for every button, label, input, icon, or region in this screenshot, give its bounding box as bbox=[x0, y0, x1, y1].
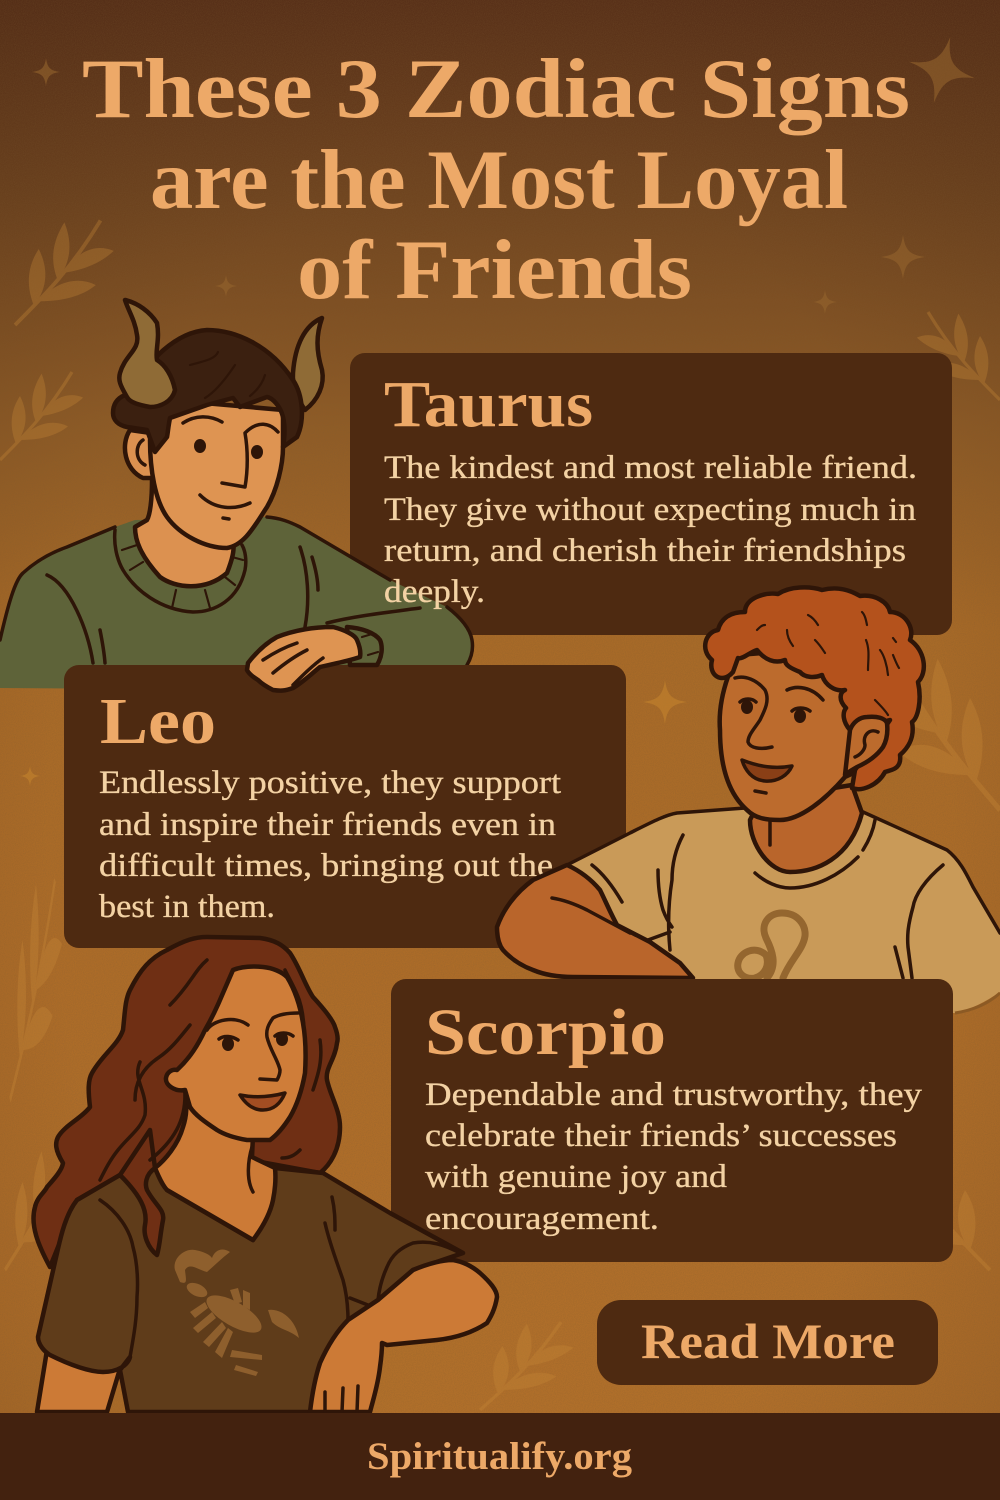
left front strand bbox=[120, 1130, 163, 1255]
panel: Scorpio bbox=[391, 979, 953, 1262]
text: Taurus heading and description bbox=[384, 368, 917, 610]
shirt outline bbox=[567, 807, 1000, 933]
shirt folds bbox=[592, 835, 943, 978]
panel: Leo bbox=[64, 665, 626, 948]
arm bbox=[497, 865, 693, 978]
text: Leo heading and description: difficult times, bringing out the bbox=[99, 848, 553, 884]
footer: Spiritualify.org bbox=[367, 1435, 633, 1478]
text: Leo heading and description: Endlessly positive, they support bbox=[99, 765, 561, 801]
face details bbox=[735, 677, 823, 793]
collar bbox=[115, 530, 246, 612]
hair strands bbox=[190, 352, 265, 398]
button: Read More: Read More bbox=[641, 1313, 895, 1369]
hair bbox=[113, 330, 302, 452]
ear bbox=[125, 430, 165, 478]
neck bbox=[750, 785, 862, 872]
left horn bbox=[119, 300, 175, 407]
text: Taurus heading and description: They give without expecting much in bbox=[384, 492, 916, 528]
right horn bbox=[293, 318, 323, 410]
text: Taurus heading and description: return, and cherish their friendships bbox=[384, 533, 906, 569]
illustration: Taurus character bbox=[0, 300, 473, 690]
title: are the Most Loyal bbox=[150, 133, 848, 227]
left arm bbox=[37, 1350, 122, 1412]
text: Scorpio heading and description: celebrate their friends’ successes bbox=[425, 1118, 897, 1154]
text: Leo heading and description: best in them. bbox=[99, 889, 275, 925]
scorpion emblem bbox=[175, 1250, 299, 1376]
collar and neck lines bbox=[755, 820, 875, 888]
title: of Friends bbox=[297, 223, 692, 317]
sweater bbox=[0, 517, 473, 690]
text: Scorpio heading and description: encouragement. bbox=[425, 1201, 659, 1237]
face details bbox=[207, 1013, 298, 1110]
face details bbox=[183, 417, 278, 519]
sweater outline bbox=[0, 517, 473, 665]
Leo symbol bbox=[738, 913, 805, 978]
head bbox=[150, 400, 283, 548]
text: Scorpio heading and description bbox=[425, 996, 923, 1237]
text: Scorpio heading and description: Scorpio bbox=[425, 996, 666, 1069]
sweater folds bbox=[47, 547, 318, 663]
title: These 3 Zodiac Signs bbox=[82, 42, 910, 136]
text: Taurus heading and description: The kindest and most reliable friend. bbox=[384, 450, 917, 486]
text: Leo heading and description: and inspire their friends even in bbox=[99, 807, 556, 843]
hair lines bbox=[100, 960, 321, 1180]
text: Taurus heading and description: Taurus bbox=[384, 368, 593, 441]
ear bbox=[845, 717, 887, 775]
shirt bbox=[567, 807, 1000, 1013]
text: Taurus heading and description: deeply. bbox=[384, 574, 485, 610]
text: Leo heading and description bbox=[99, 685, 561, 925]
head bbox=[166, 966, 306, 1140]
text: Scorpio heading and description: Dependable and trustworthy, they bbox=[425, 1077, 923, 1113]
button: Read More bbox=[597, 1300, 938, 1385]
panel: Taurus bbox=[350, 353, 952, 635]
illustration: Taurus hand and cuff bbox=[247, 627, 382, 691]
hair back bbox=[33, 937, 340, 1267]
illustration: Scorpio character bbox=[33, 937, 497, 1412]
illustration: Leo character bbox=[497, 587, 1000, 1013]
title bbox=[82, 42, 910, 317]
text: Scorpio heading and description: with genuine joy and bbox=[425, 1159, 728, 1195]
hair bbox=[705, 587, 924, 789]
text: Leo heading and description: Leo bbox=[100, 685, 216, 758]
head bbox=[720, 650, 870, 820]
shirt bbox=[38, 1168, 463, 1412]
curl details bbox=[757, 612, 899, 715]
neck and chest bbox=[155, 1090, 275, 1240]
shirt lines bbox=[100, 1197, 460, 1357]
neck bbox=[135, 480, 234, 586]
footer bbox=[0, 1413, 1000, 1500]
arm and hand bbox=[310, 1260, 497, 1412]
